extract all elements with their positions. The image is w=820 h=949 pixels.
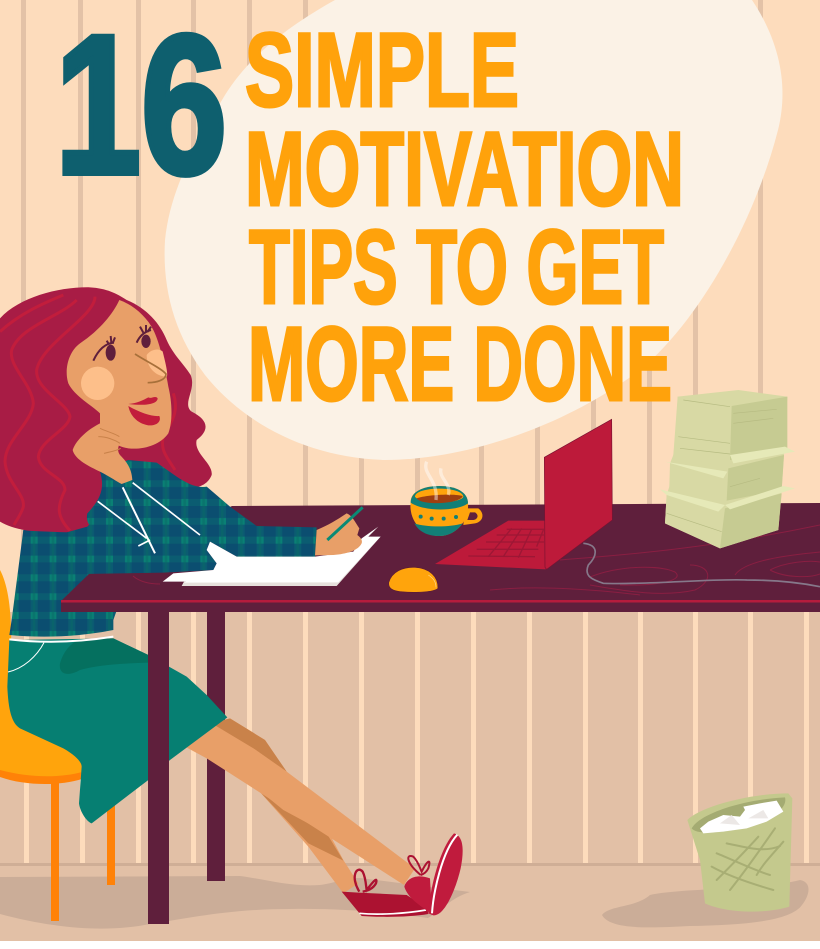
left shoe laces <box>355 870 376 892</box>
hoodie strings <box>98 483 200 553</box>
wall upper <box>0 0 820 620</box>
mouse <box>389 567 438 592</box>
skirt pocket <box>8 643 44 672</box>
desk edge line <box>61 600 820 602</box>
writing hand <box>315 513 362 555</box>
back leg <box>212 718 358 893</box>
waistband <box>9 637 113 642</box>
face <box>67 300 171 449</box>
plaid shirt upper and sleeve <box>21 460 317 575</box>
stack flaps <box>660 447 795 512</box>
coffee cup <box>410 462 482 536</box>
wall lower and floor <box>0 612 820 949</box>
floor shadow under desk <box>0 876 470 929</box>
desk front leg <box>148 612 169 924</box>
right shoe sole <box>428 833 463 915</box>
desk wood grain <box>133 525 820 595</box>
crumpled paper <box>700 801 783 833</box>
nose <box>135 354 166 383</box>
speech thought bubble <box>165 0 782 460</box>
keys <box>468 528 544 558</box>
hand on chin <box>73 423 132 484</box>
front leg <box>185 723 415 885</box>
screen back <box>544 419 612 569</box>
chair <box>0 570 115 921</box>
keyboard base <box>435 521 546 569</box>
title number 16: 16 <box>55 0 227 215</box>
desk back leg <box>207 612 225 881</box>
woman: head, hair and arm <box>0 287 381 586</box>
mouth <box>128 397 160 425</box>
cup handle <box>463 508 482 525</box>
power cable <box>583 543 820 587</box>
wastebasket <box>687 793 792 912</box>
paper top sheet and sleeve cuff <box>163 527 381 583</box>
basket crosshatch <box>712 828 783 890</box>
pen <box>327 507 363 540</box>
skirt shade <box>60 638 148 674</box>
hair <box>0 287 212 533</box>
stack page lines <box>667 400 777 532</box>
cheeks <box>81 349 167 400</box>
hair strands <box>0 295 176 531</box>
hand finger lines <box>98 428 121 453</box>
floor shadow under wastebasket <box>602 880 808 927</box>
desk <box>61 503 820 612</box>
laptop <box>435 419 820 587</box>
left shoe stripe <box>359 910 426 914</box>
steam <box>426 462 449 500</box>
paper stack <box>660 390 795 548</box>
left shoe <box>342 892 428 917</box>
woman: crossed legs and shoes <box>185 718 463 917</box>
woman: lower torso <box>9 513 133 637</box>
paper sheets <box>182 537 381 586</box>
right shoe laces <box>408 856 429 875</box>
woman: skirt <box>7 637 227 823</box>
cup body <box>410 486 468 536</box>
eyes and lashes <box>93 325 151 361</box>
right shoe stripe <box>432 835 457 913</box>
right shoe upper <box>404 876 432 915</box>
title line: simple: SIMPLE <box>245 12 519 129</box>
back leg shadow <box>212 718 343 861</box>
